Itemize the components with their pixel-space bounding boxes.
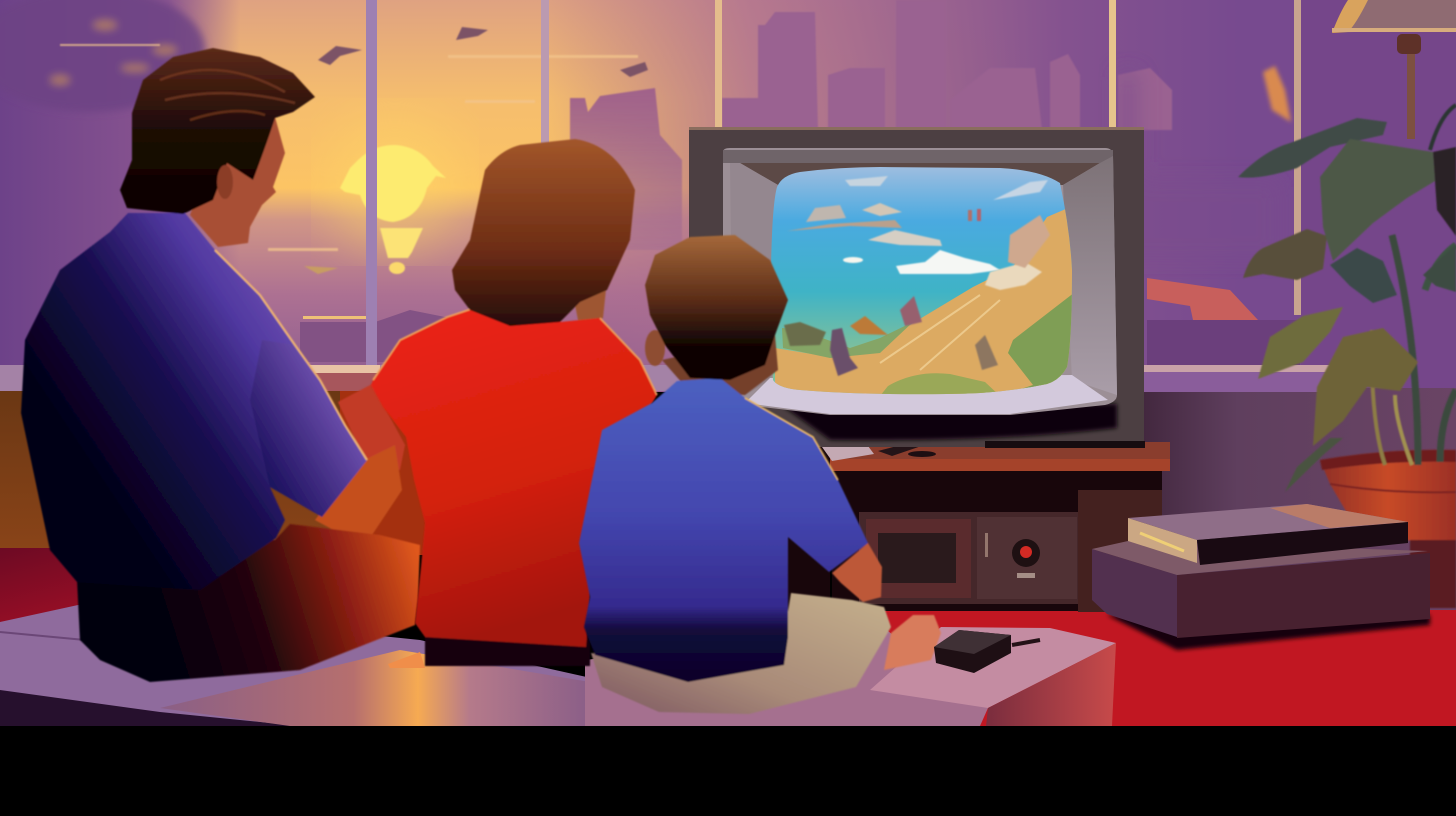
lower grass xyxy=(882,373,996,394)
harbour buildings xyxy=(300,310,480,362)
father rim light xyxy=(215,250,367,460)
father legs xyxy=(50,524,420,682)
father forearm xyxy=(315,445,402,540)
window and sunset sky xyxy=(0,0,1456,392)
city skyline xyxy=(570,0,1280,260)
vcr unit xyxy=(1092,504,1430,650)
orange cloud glow xyxy=(1263,66,1291,122)
sofa front edge xyxy=(0,690,300,726)
items on stand xyxy=(822,434,945,461)
older child shorts xyxy=(425,630,590,666)
tv bezel xyxy=(723,148,1117,415)
sunlit shore xyxy=(1147,278,1300,366)
tv shadow under bezel xyxy=(780,404,1117,440)
television xyxy=(689,127,1145,448)
younger child neck xyxy=(662,335,778,395)
islands xyxy=(787,176,1048,263)
older child skin xyxy=(575,280,607,330)
sofa right cushion xyxy=(870,627,1116,708)
younger child rim light xyxy=(745,398,838,480)
tv screen xyxy=(765,162,1077,398)
father xyxy=(21,48,420,682)
sand beach xyxy=(775,205,1075,396)
letterbox band xyxy=(0,726,1456,816)
window sill xyxy=(0,365,1334,392)
floor lamp xyxy=(1332,0,1456,139)
father ear xyxy=(217,165,233,199)
younger child legs xyxy=(591,593,891,714)
plant pot xyxy=(1320,450,1456,546)
younger child arm xyxy=(832,543,882,602)
white surf and clouds xyxy=(896,250,1000,274)
sun and reflection xyxy=(325,112,465,274)
sofa right side xyxy=(986,643,1116,726)
right grass xyxy=(1008,294,1072,388)
older child shirt xyxy=(371,306,657,647)
sprites xyxy=(784,209,1050,376)
leaves xyxy=(1238,118,1387,178)
plant stems xyxy=(1372,105,1456,465)
younger child xyxy=(579,235,941,714)
father sleeve xyxy=(250,340,367,517)
tv stand xyxy=(780,440,1170,612)
younger child hair xyxy=(645,235,788,380)
potted plant xyxy=(1238,105,1456,608)
left grass xyxy=(782,322,913,358)
younger child foot xyxy=(884,615,941,670)
game controller xyxy=(934,630,1040,673)
wall under window xyxy=(0,385,1456,612)
sofa left cushion xyxy=(0,605,600,726)
younger child ear xyxy=(645,330,665,366)
road lines xyxy=(880,295,1000,370)
sofa lit seat xyxy=(160,650,590,726)
older child hair xyxy=(452,139,635,326)
older child xyxy=(371,139,657,666)
father neck and face xyxy=(190,117,285,247)
father red hand xyxy=(338,384,405,470)
sofa xyxy=(0,605,1116,726)
father hair strands xyxy=(160,70,295,120)
window frames xyxy=(366,0,1456,392)
father shirt xyxy=(21,213,367,590)
tree foliage xyxy=(0,0,205,112)
tv cabinet xyxy=(689,127,1144,447)
clouds and birds xyxy=(60,27,648,274)
father hair xyxy=(120,48,315,214)
red carpet xyxy=(0,548,1456,726)
sofa centre cushion xyxy=(585,625,988,726)
younger child shirt xyxy=(579,378,868,682)
sofa reflection patch xyxy=(388,652,425,668)
older child rim light xyxy=(373,306,657,395)
